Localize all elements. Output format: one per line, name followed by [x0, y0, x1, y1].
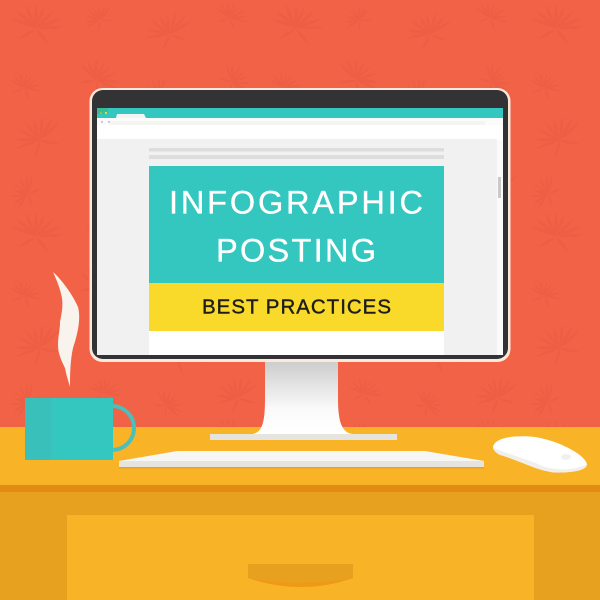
header lines [149, 148, 444, 159]
desk [0, 427, 600, 600]
monitor stand [210, 362, 397, 440]
browser window [97, 108, 503, 355]
mouse [493, 436, 587, 473]
browser tab bar [97, 108, 503, 118]
page background [97, 139, 497, 355]
wall background [0, 0, 600, 428]
title line 2: POSTING [216, 232, 376, 268]
scrollbar [497, 140, 503, 355]
banner yellow [149, 283, 444, 331]
browser toolbar [97, 118, 503, 125]
mug handle [90, 406, 134, 450]
banner yellow: BEST PRACTICES [202, 296, 391, 318]
monitor [90, 88, 510, 362]
monitor frame [90, 88, 510, 362]
coffee mug [25, 398, 134, 460]
drawer handle [248, 564, 353, 587]
drawer [67, 515, 534, 600]
page column [149, 331, 444, 355]
title line 1: INFOGRAPHIC [169, 184, 423, 220]
banner teal [149, 166, 444, 284]
keyboard [119, 451, 484, 468]
steam [53, 272, 79, 387]
